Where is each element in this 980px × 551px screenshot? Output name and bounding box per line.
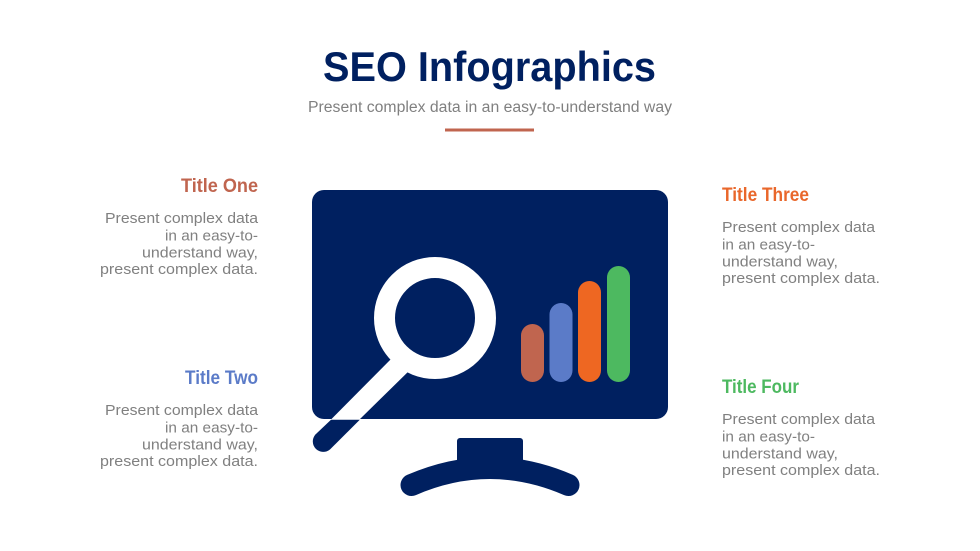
- monitor neck: [457, 438, 523, 470]
- text block: title one: Present complex data: [105, 210, 259, 227]
- text block: title four: Present complex data: [722, 411, 876, 428]
- icon: monitor with magnifier and bars: [312, 190, 668, 485]
- text block: title four: understand way,: [722, 446, 838, 462]
- monitor screen: [312, 190, 668, 419]
- magnifier lens ring: [384, 268, 486, 368]
- text block: title two: understand way,: [142, 436, 258, 454]
- text block: title three: present complex data.: [722, 270, 880, 287]
- panel: title two: [100, 368, 259, 470]
- text block: title two: [100, 402, 259, 470]
- text block: title three: [722, 219, 880, 287]
- bar 3: [578, 281, 601, 382]
- text block: title one: in an easy-to-: [165, 228, 258, 244]
- magnifier: [313, 268, 486, 452]
- text block: title one: present complex data.: [100, 261, 258, 278]
- bar chart: [521, 266, 630, 382]
- panel: title three: [722, 185, 880, 287]
- title underline: [445, 128, 534, 132]
- title: SEO Infographics: [323, 43, 656, 90]
- text block: title four: in an easy-to-: [722, 428, 815, 446]
- heading: title two: Title Two: [185, 368, 258, 389]
- text block: title four: present complex data.: [722, 462, 880, 479]
- heading: title four: Title Four: [722, 377, 800, 398]
- subtitle: Present complex data in an easy-to-understand way: [308, 99, 672, 116]
- text block: title two: in an easy-to-: [165, 420, 258, 436]
- text block: title two: present complex data.: [100, 453, 258, 470]
- text block: title three: in an easy-to-: [722, 236, 815, 254]
- panel: title one: [100, 176, 259, 278]
- text block: title four: [722, 411, 880, 479]
- bar 1: [521, 324, 544, 382]
- panel: title four: [722, 377, 880, 479]
- monitor base: [412, 468, 568, 485]
- text block: title three: understand way,: [722, 254, 838, 270]
- text block: title two: Present complex data: [105, 402, 259, 419]
- heading: title one: Title One: [181, 176, 258, 197]
- heading: title three: Title Three: [722, 185, 809, 206]
- magnifier handle below screen: [313, 420, 360, 452]
- magnifier handle on screen: [332, 355, 414, 419]
- bar 2: [550, 303, 572, 382]
- bar 4: [607, 266, 630, 382]
- text block: title one: [100, 210, 259, 278]
- text block: title three: Present complex data: [722, 219, 876, 236]
- text block: title one: understand way,: [142, 244, 258, 262]
